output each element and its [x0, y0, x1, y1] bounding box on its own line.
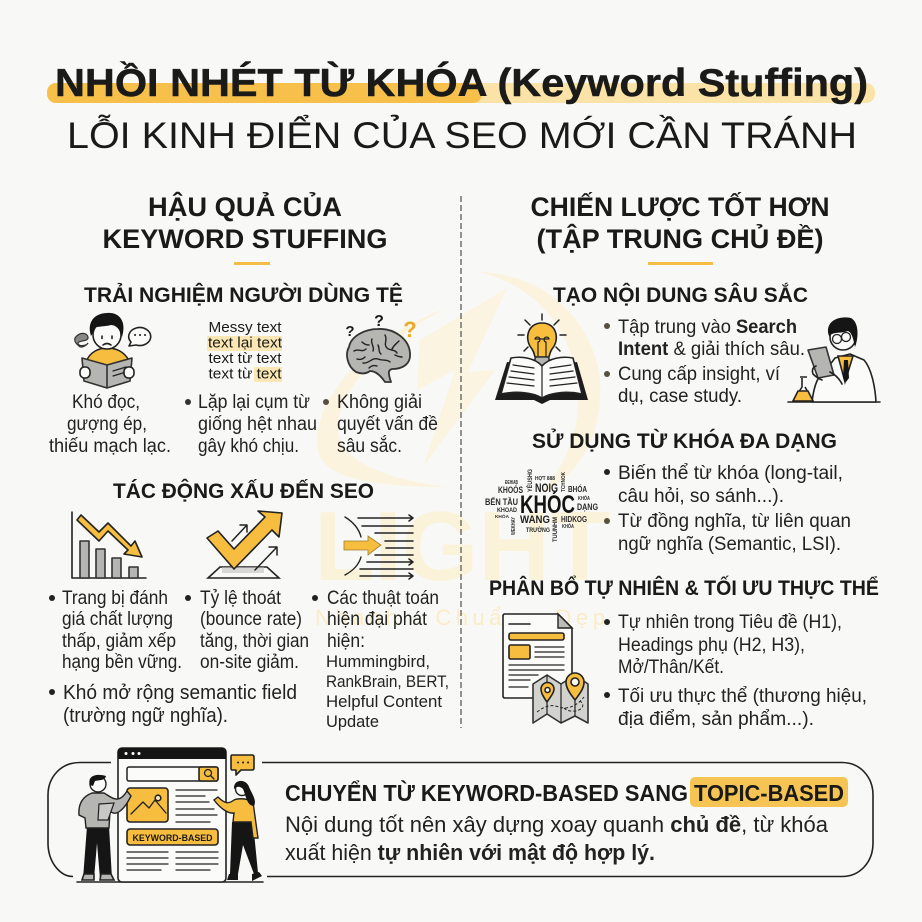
- bullets: placement and entities: Headings phụ (H2, H3),: [618, 635, 805, 656]
- bullets: search intent and insight: Intent & giải thích sâu.: [618, 339, 805, 360]
- bullet: no deep solutions: Không giải: [337, 392, 422, 413]
- bullet: modern algorithms: Helpful Content: [326, 692, 442, 711]
- icon: word cloud: TCHNOK: [561, 472, 567, 492]
- takeaway heading: [285, 777, 848, 807]
- icon: brain with question marks: ?: [403, 317, 417, 342]
- bullets: placement and entities: Tối ưu thực thể (thương hiệu,: [618, 686, 867, 707]
- bullets: keyword variations and synonyms: [604, 463, 851, 555]
- woman: [230, 822, 258, 874]
- title: [47, 61, 875, 156]
- icon: word cloud: TUUNHM: [553, 517, 559, 542]
- icon: rising bounce rate: [207, 511, 282, 578]
- icon: word cloud: YÊUSHG: [525, 469, 534, 492]
- bullet: modern algorithms: [312, 588, 449, 731]
- panel: bottom takeaway: [48, 748, 873, 882]
- takeaway heading: TOPIC-BASED: [694, 780, 844, 806]
- bullets: keyword variations and synonyms: ngữ nghĩa (Semantic, LSI).: [618, 534, 841, 555]
- icon: word cloud: NOIG: [535, 481, 558, 495]
- panel: SEO impact: [49, 479, 449, 731]
- icon: word cloud: HỢT 888: [535, 476, 555, 482]
- column divider: [460, 196, 462, 728]
- bullet: bounce rate: tăng, thời gian: [200, 631, 309, 652]
- icon: word cloud: WANG: [520, 514, 550, 526]
- bullets: keyword variations and synonyms: câu hỏi, so sánh...).: [618, 486, 784, 507]
- title: LỖI KINH ĐIỂN CỦA SEO MỚI CẦN TRÁNH: [67, 114, 857, 156]
- heading: better strategy: CHIẾN LƯỢC TỐT HƠN: [530, 190, 830, 222]
- heading: bad SEO impact: TÁC ĐỘNG XẤU ĐẾN SEO: [113, 479, 374, 503]
- heading: bad user experience: TRẢI NGHIỆM NGƯỜI DÙNG TỆ: [84, 283, 403, 307]
- icon: word cloud: KHÓA: [495, 512, 510, 519]
- takeaway text: xuất hiện tự nhiên với mật độ hợp lý.: [285, 840, 655, 865]
- bullet: low quality rating: [49, 588, 182, 673]
- bullets: search intent and insight: [604, 317, 805, 407]
- bullet: bounce rate: on-site giảm.: [200, 652, 299, 673]
- messy text illustration: [207, 319, 283, 382]
- icon: word cloud: DẠNG: [577, 502, 598, 512]
- icon: word cloud: ĐEHIAB: [505, 480, 518, 486]
- bullet: modern algorithms: Update: [326, 712, 379, 731]
- bullet: modern algorithms: hiện:: [327, 631, 365, 652]
- icon: word cloud: BẾN TẦU: [485, 497, 518, 507]
- bullets: keyword variations and synonyms: Từ đồng nghĩa, từ liên quan: [618, 511, 851, 532]
- illustration: two people at keyword-based web page: KEYWORD-BASED: [132, 833, 213, 844]
- man: [83, 826, 112, 879]
- bullets: placement and entities: Tự nhiên trong Tiêu đề (H1),: [618, 612, 842, 633]
- title: NHỒI NHÉT TỪ KHÓA (Keyword Stuffing): [55, 61, 868, 105]
- watermark: logo: LIGHT: [314, 491, 610, 601]
- bullets: placement and entities: địa điểm, sản phẩm...).: [618, 709, 814, 730]
- bullet: low quality rating: hạng bền vững.: [62, 652, 182, 673]
- messy text illustration: Messy text: [208, 319, 282, 336]
- panel: user experience: [49, 283, 438, 457]
- icon: word cloud: TRƯỜNG: [526, 526, 550, 534]
- bullet: modern algorithms: RankBrain, BERT,: [326, 672, 449, 691]
- illustration: two people at keyword-based web page: [77, 748, 263, 882]
- icon: word cloud: KHÓA: [562, 522, 574, 530]
- takeaway text: [285, 812, 829, 865]
- heading: consequences: [102, 190, 388, 265]
- bullets: placement and entities: [604, 612, 867, 730]
- cause text: hard to read: gượng ép,: [67, 414, 147, 435]
- bullet: repeated phrases: giống hệt nhau: [198, 414, 317, 435]
- bullet: low quality rating: thấp, giảm xếp: [62, 631, 176, 652]
- icon: word cloud: BHÓA: [568, 485, 587, 494]
- cause text: hard to read: Khó đọc,: [72, 392, 140, 413]
- bullet: no deep solutions: [323, 392, 438, 457]
- icon: word cloud: HIDKOG: [561, 515, 587, 524]
- icon: word cloud: KHÓC: [520, 489, 575, 519]
- icon: brain with question marks: ?: [345, 323, 355, 340]
- bullet: modern algorithms: hiện đại phát: [327, 609, 428, 630]
- bullet: bounce rate: [185, 588, 309, 673]
- bullet: low quality rating: Trang bị đánh: [62, 588, 168, 609]
- cause text: hard to read: thiếu mạch lạc.: [49, 436, 171, 457]
- heading: better strategy: [530, 190, 830, 265]
- heading: better strategy: (TẬP TRUNG CHỦ ĐỀ): [536, 222, 824, 254]
- messy text illustration: text từ text: [208, 366, 282, 382]
- panel: natural distribution: [489, 576, 879, 730]
- bullet: bounce rate: Tỷ lệ thoát: [200, 588, 282, 609]
- bullet: no deep solutions: quyết vấn đề: [337, 414, 438, 435]
- icon: brain with question marks: ?: [374, 313, 384, 330]
- icon: algorithm filter: [344, 515, 413, 579]
- panel: deep content: [495, 283, 880, 407]
- bullet: repeated phrases: gây khó chịu.: [198, 436, 299, 457]
- cause text: hard to read: [49, 392, 171, 457]
- bullets: placement and entities: Mở/Thân/Kết.: [618, 657, 724, 678]
- bullet: semantic field: (trường ngữ nghĩa).: [63, 705, 228, 727]
- takeaway text: Nội dung tốt nên xây dựng xoay quanh chủ đề, từ khóa: [285, 812, 829, 837]
- bullet: modern algorithms: Các thuật toán: [327, 588, 439, 609]
- bullet: no deep solutions: sâu sắc.: [337, 435, 402, 457]
- icon: word cloud: WEKHAY: [511, 517, 517, 535]
- messy text illustration: text từ text: [208, 350, 282, 367]
- heading: consequences: KEYWORD STUFFING: [102, 224, 388, 254]
- bullet: bounce rate: (bounce rate): [200, 609, 302, 630]
- takeaway heading: CHUYỂN TỪ KEYWORD-BASED SANG: [285, 779, 688, 806]
- bullet: repeated phrases: Lặp lại cụm từ: [198, 392, 310, 413]
- bullets: search intent and insight: Cung cấp insight, ví: [618, 364, 781, 385]
- watermark: logo: [314, 272, 610, 630]
- frame: [48, 762, 873, 876]
- icon: word cloud: KHOÓS: [498, 484, 523, 495]
- heading: deep content: TẠO NỘI DUNG SÂU SẮC: [553, 283, 808, 307]
- icon: word cloud: [485, 469, 598, 542]
- icon: word cloud: KHOAD: [497, 507, 517, 514]
- heading: varied keywords: SỬ DỤNG TỪ KHÓA ĐA DẠNG: [532, 429, 837, 453]
- icon: document and map: [503, 614, 588, 723]
- bullet: modern algorithms: Hummingbird,: [326, 652, 430, 671]
- bullet: low quality rating: giá chất lượng: [62, 609, 173, 630]
- icon: light bulb and open book: [495, 314, 588, 404]
- icon: brain with question marks: [345, 313, 417, 382]
- icon: word cloud: KHÓA: [578, 494, 590, 502]
- icon: scientist with tablet: [788, 317, 880, 402]
- watermark: logo: Nhanh - Chuẩn - Đẹp: [315, 605, 605, 630]
- icon: falling bar chart: [72, 512, 146, 578]
- bullet: repeated phrases: [185, 392, 317, 457]
- panel: varied keywords: [485, 429, 851, 555]
- bullets: keyword variations and synonyms: Biến thể từ khóa (long-tail,: [618, 463, 843, 484]
- heading: natural distribution: PHÂN BỔ TỰ NHIÊN & TỐI ƯU THỰC THỂ: [489, 576, 879, 600]
- bullets: search intent and insight: dụ, case study.: [618, 386, 742, 407]
- heading: consequences: HẬU QUẢ CỦA: [148, 190, 342, 222]
- icon: confused reader: [75, 313, 151, 388]
- bullet: semantic field: [49, 682, 297, 727]
- bullets: search intent and insight: Tập trung vào Search: [618, 317, 797, 338]
- messy text illustration: text lại text: [208, 334, 283, 352]
- bullet: semantic field: Khó mở rộng semantic field: [63, 682, 297, 704]
